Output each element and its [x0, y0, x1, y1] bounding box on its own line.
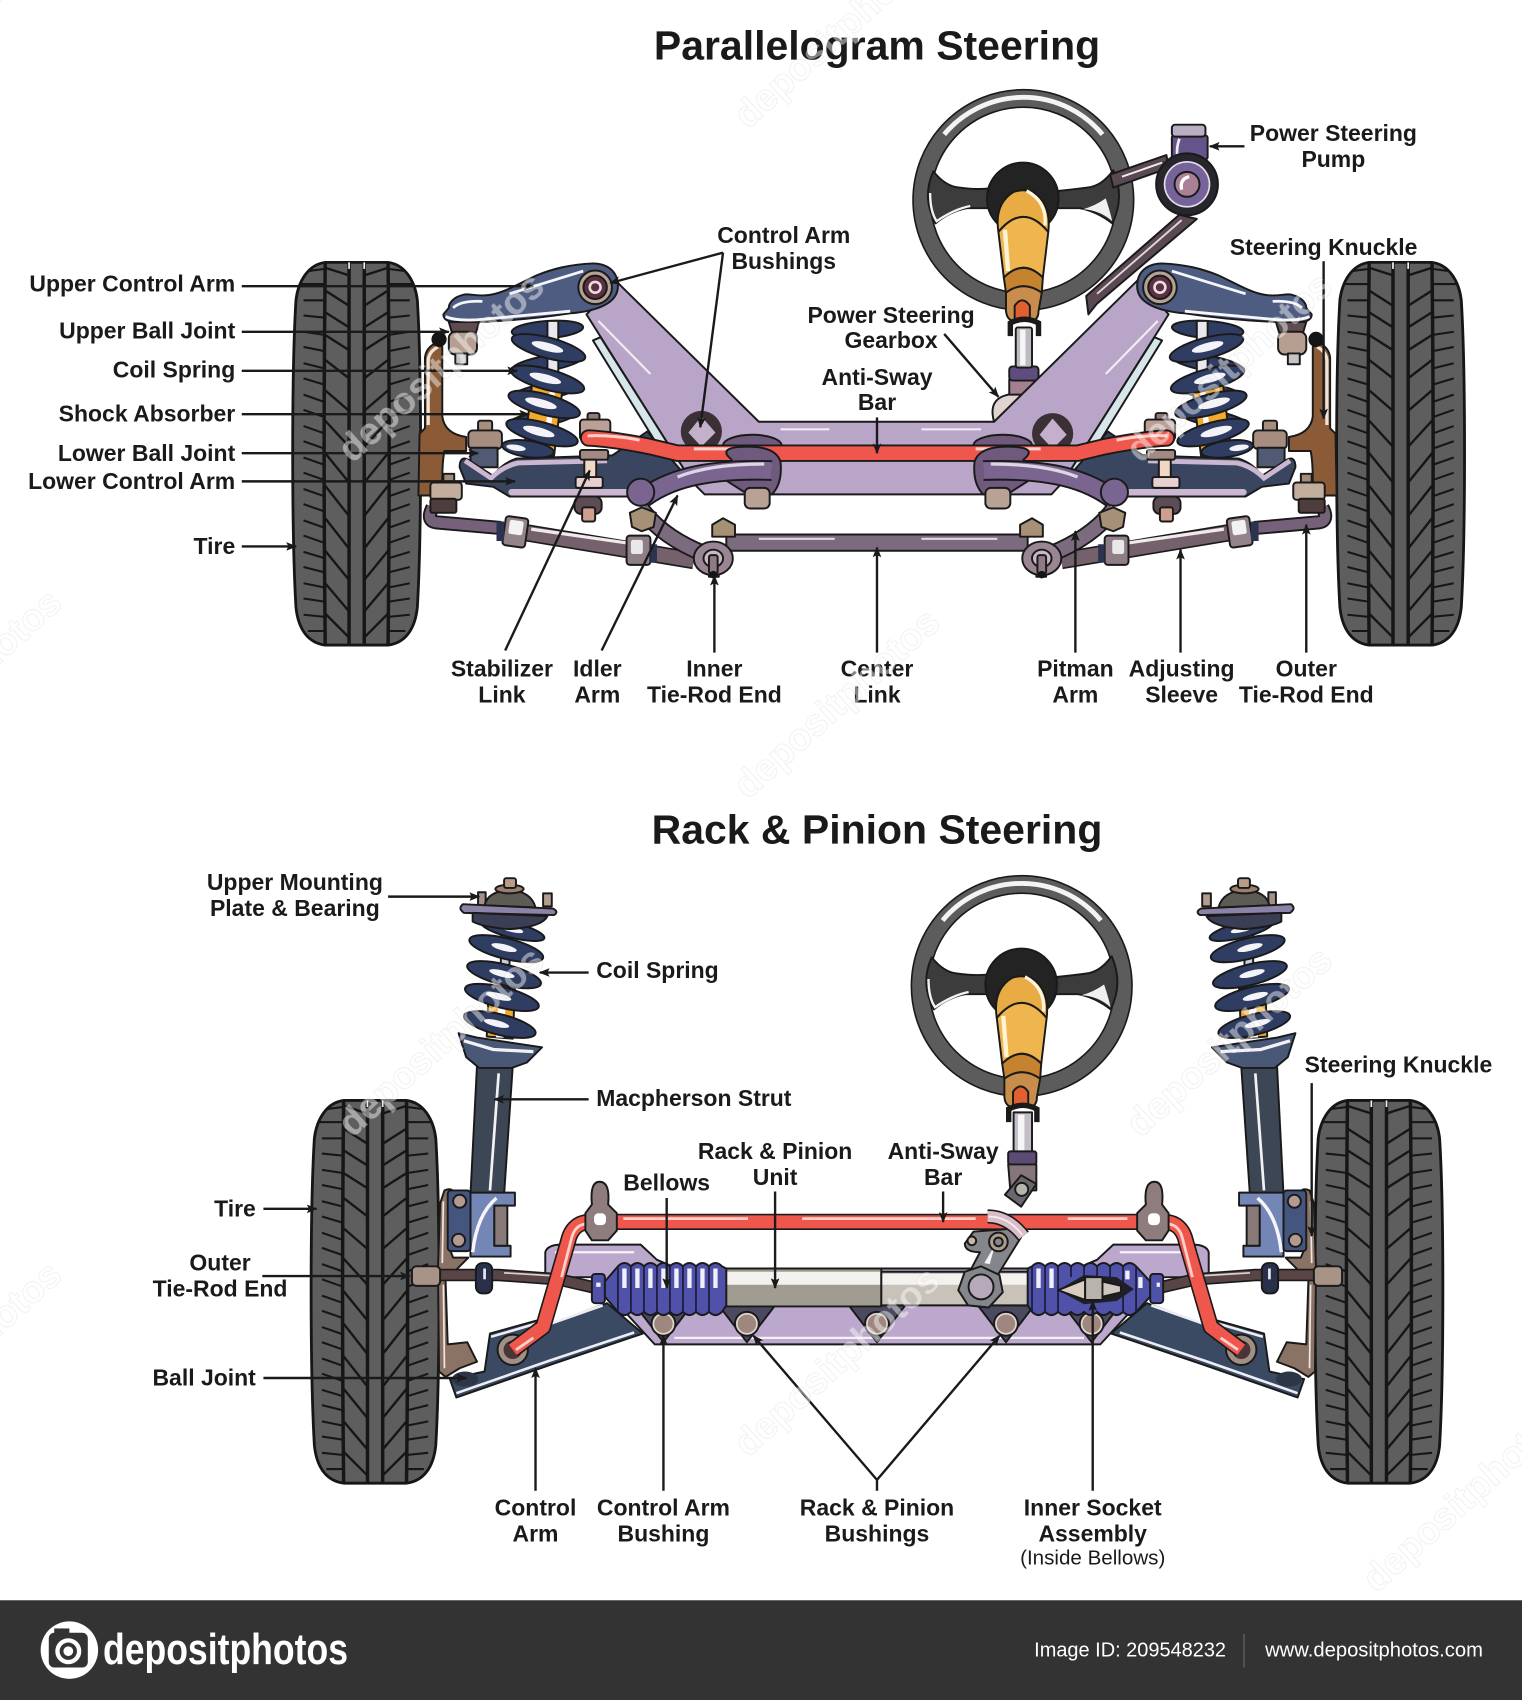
watermarks: depositphotos	[726, 601, 948, 807]
title: Rack & Pinion Steering: Rack & Pinion Steering	[652, 806, 1102, 852]
steering linkage: left	[430, 447, 781, 578]
label: Rack & Pinion Unit	[698, 1138, 852, 1288]
label: Rack & Pinion Bushings	[753, 1336, 999, 1547]
strut and tie rod: left	[412, 878, 596, 1293]
label: Upper Ball Joint: Upper Ball Joint	[59, 317, 236, 343]
label: Steering Knuckle: Steering Knuckle	[1305, 1051, 1492, 1077]
frame: purple subframe	[586, 280, 1169, 494]
label: Inner Socket Assembly: Inner Socket	[1024, 1495, 1162, 1521]
label: Outer Tie-Rod End: Tie-Rod End	[1239, 682, 1374, 708]
tire: left	[311, 1100, 439, 1483]
label: Tire: Tire	[194, 533, 235, 559]
label: Power Steering Gearbox	[807, 302, 998, 397]
rack and pinion unit	[725, 1268, 1030, 1306]
label: Control Arm Bushings: Control Arm	[717, 222, 850, 248]
label: Anti-Sway Bar: Anti-Sway	[888, 1138, 999, 1164]
tire: right	[1337, 262, 1465, 645]
label: Rack & Pinion Bushings: Rack & Pinion	[800, 1495, 954, 1521]
footer divider	[1243, 1634, 1244, 1667]
footer bar	[0, 1600, 1522, 1700]
steering linkage: right	[974, 447, 1325, 578]
label: Rack & Pinion Unit: Unit	[753, 1164, 798, 1190]
website: www.depositphotos.com	[1264, 1639, 1483, 1662]
label: Inner Socket Assembly	[1020, 1301, 1165, 1569]
title: Parallelogram Steering: Parallelogram Steering	[654, 23, 1100, 69]
label: Control Arm Bushing	[597, 1336, 730, 1547]
label: Bellows: Bellows	[623, 1169, 710, 1195]
labels: parallelogram steering	[28, 120, 1417, 708]
label: Inner Socket Assembly: (Inside Bellows)	[1020, 1546, 1165, 1569]
label: Control Arm Bushing: Control Arm	[597, 1495, 730, 1521]
label: Control Arm Bushings	[610, 222, 850, 427]
label: Outer Tie-Rod End: Tie-Rod End	[153, 1276, 287, 1302]
steering wheel and column	[922, 97, 1125, 336]
label: Coil Spring: Coil Spring	[113, 356, 235, 382]
label: Pitman Arm: Pitman	[1037, 656, 1114, 682]
suspension: right	[973, 263, 1337, 521]
label: Center Link: Link	[853, 682, 901, 708]
label: Upper Mounting Plate & Bearing: Plate & Bearing	[210, 895, 380, 921]
control arm and knuckle: left	[438, 1189, 643, 1398]
steering wheel and column	[920, 883, 1123, 1122]
labels: rack and pinion steering	[152, 869, 1492, 1569]
label: Outer Tie-Rod End: Outer	[1276, 656, 1337, 682]
label: Shock Absorber: Shock Absorber	[59, 401, 235, 427]
label: Macpherson Strut: Macpherson Strut	[596, 1085, 792, 1111]
diagram: rack and pinion steering	[311, 878, 1443, 1483]
label: Inner Tie-Rod End: Tie-Rod End	[647, 682, 782, 708]
label: Adjusting Sleeve	[1129, 550, 1235, 708]
label: Tire: Tire	[214, 1195, 256, 1221]
label: Center Link	[841, 548, 913, 708]
anti-sway bar	[513, 1219, 1241, 1350]
label: Inner Tie-Rod End: Inner	[686, 656, 743, 682]
logo: depositphotos camera	[41, 1621, 98, 1679]
label: Control Arm: Arm	[513, 1521, 558, 1547]
label: Stabilizer Link	[451, 471, 590, 708]
label: Upper Mounting Plate & Bearing	[207, 869, 479, 921]
watermarks: depositphotos	[330, 265, 553, 471]
watermarks: depositphotos	[1118, 939, 1341, 1145]
label: Bellows	[623, 1169, 710, 1288]
logo wordmark: depositphotos	[103, 1626, 348, 1674]
label: Idler Arm: Arm	[574, 682, 620, 708]
tire: right	[1315, 1100, 1443, 1483]
label: Tire	[214, 1195, 317, 1221]
bellows: right with inner socket	[1028, 1263, 1163, 1315]
bar clamps	[585, 1182, 1169, 1240]
label: Anti-Sway Bar top	[821, 364, 933, 453]
label: Pitman Arm	[1037, 531, 1114, 708]
label: Control Arm Bushing: Bushing	[618, 1521, 709, 1547]
watermarks: depositphotos	[726, 1259, 948, 1465]
label: Adjusting Sleeve: Sleeve	[1145, 682, 1218, 708]
image id: Image ID: 209548232	[1034, 1639, 1226, 1662]
label: Outer Tie-Rod End: Outer	[189, 1250, 251, 1276]
label: Power Steering Pump: Pump	[1301, 146, 1365, 172]
watermarks: depositphotos	[1118, 265, 1341, 471]
label: Adjusting Sleeve: Adjusting	[1129, 656, 1235, 682]
label: Rack & Pinion Unit: Rack & Pinion	[698, 1138, 852, 1164]
label: Inner Tie-Rod End	[647, 576, 782, 708]
power steering pump	[1086, 125, 1218, 314]
label: Idler Arm: Idler	[573, 656, 622, 682]
label: Anti-Sway Bar top: Anti-Sway	[821, 364, 933, 390]
bellows: left	[592, 1263, 726, 1315]
tire: left	[293, 262, 421, 645]
label: Tire	[194, 533, 296, 559]
diagram: parallelogram steering	[293, 97, 1465, 645]
strut and tie rod: right	[1158, 878, 1342, 1293]
label: Upper Control Arm: Upper Control Arm	[29, 271, 235, 297]
label: Power Steering Pump: Power Steering	[1250, 120, 1417, 146]
label: Anti-Sway Bar	[888, 1138, 999, 1222]
watermarks: depositphotos	[330, 939, 553, 1145]
pinion and universal joint	[958, 1112, 1036, 1308]
control arm and knuckle: right	[1111, 1189, 1316, 1398]
label: Idler Arm	[573, 495, 678, 708]
label: Outer Tie-Rod End	[153, 1250, 410, 1302]
anti-sway bar	[588, 436, 1168, 453]
power steering gearbox	[993, 327, 1041, 422]
label: Coil Spring: Coil Spring	[596, 957, 719, 983]
label: Power Steering Gearbox: Power Steering	[807, 302, 975, 328]
label: Pitman Arm: Arm	[1052, 682, 1098, 708]
label: Power Steering Pump	[1210, 120, 1417, 172]
label: Ball Joint: Ball Joint	[152, 1365, 256, 1391]
label: Steering Knuckle: Steering Knuckle	[1230, 234, 1417, 260]
label: Lower Ball Joint: Lower Ball Joint	[58, 440, 236, 466]
label: Stabilizer Link: Link	[478, 682, 526, 708]
label: Power Steering Gearbox: Gearbox	[844, 327, 938, 353]
label: Stabilizer Link: Stabilizer	[451, 656, 553, 682]
label: Lower Control Arm: Lower Control Arm	[28, 468, 235, 494]
label: Control Arm: Control	[495, 1495, 576, 1521]
label: Center Link: Center	[841, 656, 913, 682]
subframe	[545, 1245, 1209, 1344]
label: Anti-Sway Bar top: Bar	[858, 389, 896, 415]
label: Anti-Sway Bar: Bar	[924, 1164, 962, 1190]
suspension: left	[418, 263, 782, 521]
label: Inner Socket Assembly: Assembly	[1038, 1521, 1147, 1547]
center link	[726, 535, 1028, 551]
label: Upper Mounting Plate & Bearing: Upper Mounting	[207, 869, 383, 895]
label: Outer Tie-Rod End	[1239, 525, 1374, 708]
label: Rack & Pinion Bushings: Bushings	[825, 1521, 929, 1547]
label: Control Arm Bushings: Bushings	[731, 248, 836, 274]
label: Control Arm	[495, 1368, 576, 1547]
rack bushings	[635, 1305, 1120, 1342]
